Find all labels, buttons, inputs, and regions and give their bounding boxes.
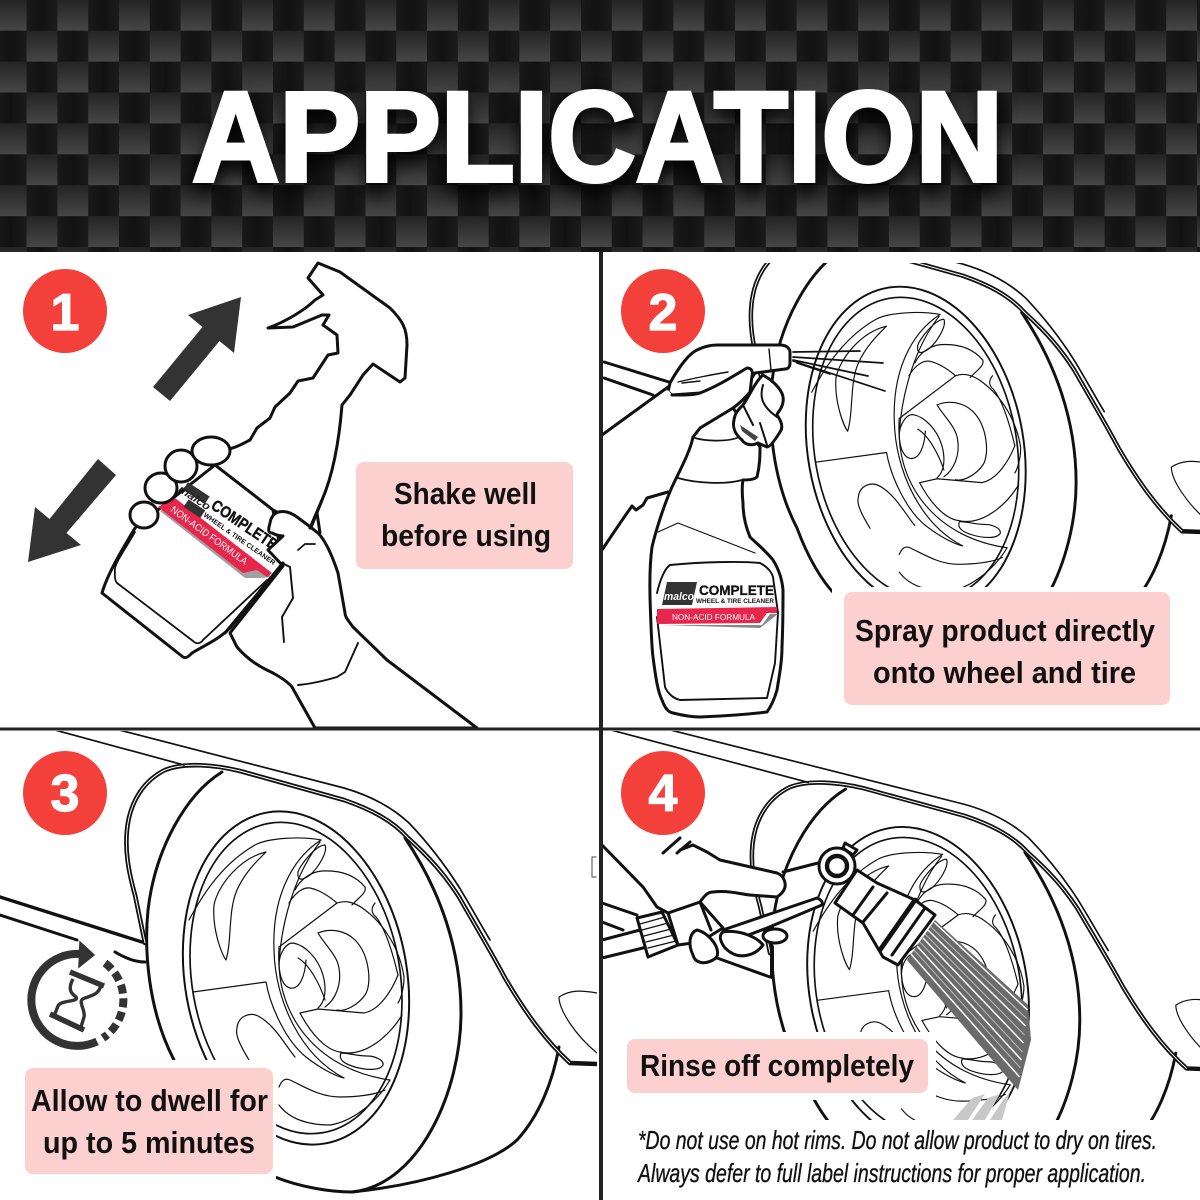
illustration: shaken spray bottle in hand [102,263,477,728]
label: rinse: Rinse off completely [640,1048,915,1083]
label: allow to dwell: up to 5 minutes [43,1125,255,1160]
step badge 4 [621,751,705,835]
bottle label [657,582,778,628]
water spray [907,920,1031,1090]
illustration: shaken spray bottle in hand: WHEEL & TIRE CLEANER [202,512,276,567]
step badge 1: 1 [51,284,79,342]
label: red band [160,502,272,578]
spray mist lines [793,351,885,391]
illustration: shaken spray bottle in hand: malco [176,483,213,513]
sprayer head [668,345,790,408]
step badge 2: 2 [649,284,677,342]
ring handle [819,848,855,884]
arrow down-left [28,459,116,562]
label: shake well [356,462,573,569]
step badge 2 [621,269,705,353]
step badge 1 [23,269,107,353]
panel 2: spray [603,263,1200,718]
hose fitting [637,912,678,957]
fingers [130,437,230,528]
label: spray product: onto wheel and tire [873,655,1136,690]
illustration: shaken spray bottle in hand: COMPLETE [208,497,281,554]
hand [230,511,477,728]
illustration: wheel and tire [0,707,597,1192]
illustration: gloved hand with hose nozzle [602,800,935,977]
label: allow to dwell [25,1068,273,1174]
arrow up-right [153,297,241,401]
header: carbon fibre banner with title [0,0,1200,252]
label: spray product: Spray product directly [855,613,1156,648]
illustration: hand and spray bottle [602,345,790,717]
label: shake well: before using [381,518,551,553]
bottle label: malco [664,591,694,603]
illustration: wheel and tire [612,731,1200,1120]
hand on trigger [606,368,752,437]
label: rinse [627,1039,928,1093]
footnote [637,1125,1157,1188]
step badge 3 [23,751,107,835]
panel 1: shake well [23,263,573,728]
illustration: shaken spray bottle in hand: NON-ACID FORMULA [168,505,249,568]
bottle label: COMPLETE [699,582,774,598]
gray smudge [953,1092,1010,1120]
trigger lever [723,898,822,942]
label: shake well: Shake well [394,476,537,511]
illustration: wheel and tire [748,263,1200,594]
bottle label: NON-ACID FORMULA [672,612,755,622]
bottle label: WHEEL & TIRE CLEANER [696,598,774,605]
step badge 4: 4 [649,765,678,823]
label: allow to dwell: Allow to dwell for [31,1083,268,1118]
nozzle [835,870,935,965]
title: APPLICATION [192,66,1003,209]
panel 3: dwell [0,707,597,1192]
panel 4: rinse [599,727,1200,1192]
fingers [690,930,718,963]
label: spray product [844,592,1170,705]
step badge 3: 3 [51,765,79,823]
icon: hourglass timer [31,942,123,1046]
